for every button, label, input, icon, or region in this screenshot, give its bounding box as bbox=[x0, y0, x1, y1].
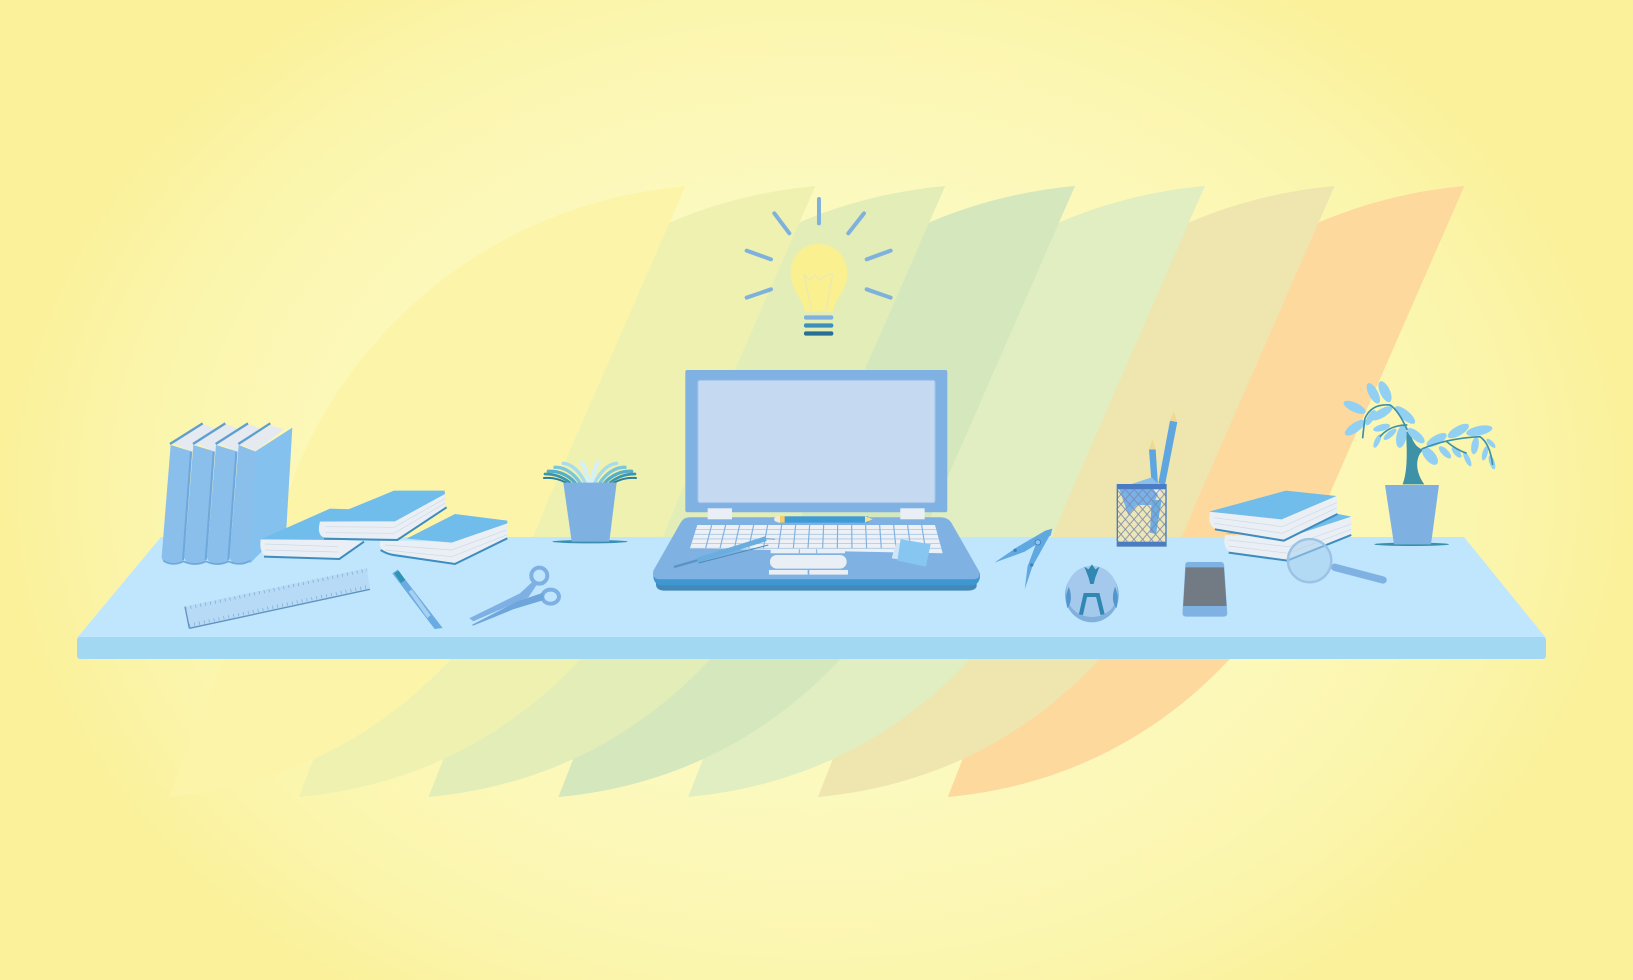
idea light bulb bbox=[747, 199, 891, 336]
small potted plant bbox=[544, 463, 636, 543]
laptop lid bbox=[685, 370, 947, 512]
laptop bbox=[653, 370, 980, 591]
rays bbox=[747, 199, 891, 298]
branches bbox=[1363, 405, 1493, 465]
filament bbox=[804, 274, 833, 311]
pot bbox=[563, 483, 617, 542]
book: top centre bbox=[319, 491, 447, 540]
magnifying glass bbox=[1288, 539, 1383, 582]
book: lower bbox=[1224, 514, 1351, 561]
smartphone bbox=[1183, 562, 1227, 617]
pen on keyboard bbox=[674, 539, 775, 567]
ruler bbox=[185, 568, 370, 628]
book: upper bbox=[1209, 491, 1337, 541]
leaves bbox=[1342, 379, 1497, 470]
laptop base bbox=[653, 517, 980, 591]
sticky notes bbox=[892, 539, 931, 567]
mesh cup body bbox=[1117, 484, 1167, 547]
screen bbox=[698, 380, 935, 503]
large potted plant bbox=[1342, 379, 1497, 546]
trackpad bbox=[769, 555, 848, 575]
utility knife bbox=[392, 570, 443, 629]
fan foliage bbox=[544, 463, 636, 483]
pot shadow bbox=[552, 540, 628, 543]
pot bbox=[1385, 485, 1439, 544]
compass bbox=[994, 529, 1052, 589]
pencil on hinge bbox=[774, 516, 873, 523]
bulb base bbox=[804, 315, 833, 336]
scissors bbox=[469, 568, 559, 626]
hinges bbox=[708, 508, 925, 519]
book: back left bbox=[260, 509, 373, 559]
standing books bbox=[162, 423, 292, 565]
colour leaf bands bbox=[169, 186, 1464, 797]
pencils bbox=[1149, 411, 1177, 485]
stacked books right bbox=[1209, 491, 1351, 561]
pot shadow bbox=[1374, 543, 1449, 546]
stacked flat books left bbox=[260, 491, 507, 564]
book: right bbox=[380, 514, 507, 564]
computer mouse bbox=[1065, 564, 1119, 622]
desk bbox=[77, 537, 1546, 659]
trunk bbox=[1403, 432, 1424, 484]
bulb glass bbox=[791, 244, 847, 312]
pencil cup bbox=[1117, 411, 1177, 547]
folded paper bbox=[1132, 477, 1159, 490]
keyboard bbox=[690, 525, 943, 553]
